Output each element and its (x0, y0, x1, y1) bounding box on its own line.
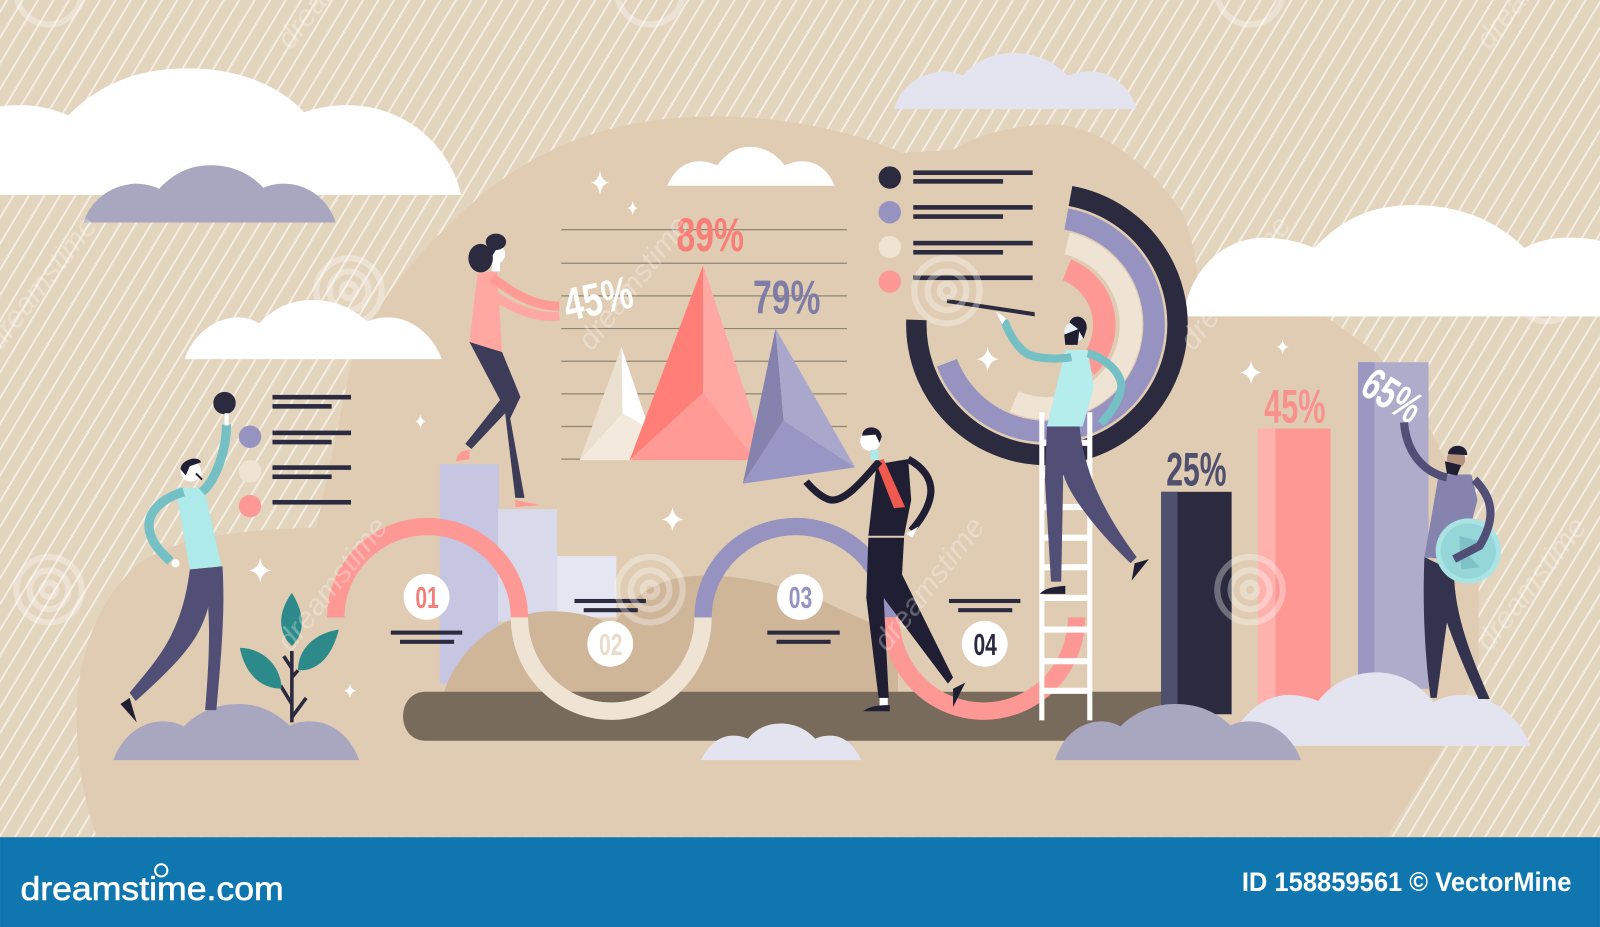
purple triangle (743, 329, 855, 484)
bar 45%: 45% (1264, 380, 1325, 432)
cloud: light bottom right (1230, 672, 1531, 746)
hill (444, 575, 898, 694)
step 04 (949, 599, 1020, 667)
cloud: grey bottom right (1055, 704, 1301, 760)
step 01 (391, 574, 462, 644)
watermarks (16, 0, 1580, 622)
bar 65%: 65% (1353, 358, 1432, 433)
background blob (77, 116, 1479, 837)
footer logo: dreamstime.com (20, 871, 284, 908)
bar 45% (1258, 380, 1331, 704)
watermark text: dreamstime (571, 209, 696, 356)
beige triangle (580, 347, 649, 460)
right legend (879, 166, 1033, 293)
watermark text: dreamstime (1173, 209, 1298, 356)
bar 25%: 25% (1166, 444, 1227, 496)
watermark text: dreamstime (1468, 510, 1594, 657)
ground bar (403, 692, 1163, 741)
hill overlap (444, 611, 633, 694)
watermark text: dreamstime (866, 510, 992, 657)
cloud: light top centre (894, 53, 1137, 109)
cloud: large white right (1184, 205, 1600, 316)
cloud: white mid left (185, 300, 442, 359)
step 02: 02 (599, 628, 622, 662)
person: man on ladder (947, 299, 1149, 594)
radial chart (916, 196, 1178, 455)
footer bar (0, 837, 1600, 927)
bar 25% (1161, 444, 1232, 714)
cloud: large white top left (0, 68, 461, 195)
step bars (440, 464, 616, 684)
step 01: 01 (415, 581, 439, 615)
footer image id and credit: ID 158859561 © VectorMine (1242, 867, 1571, 897)
label 89%: 89% (677, 209, 744, 261)
step 03 (767, 574, 840, 644)
person: man with legend ball (120, 392, 236, 722)
watermark text (0, 0, 1594, 657)
step 02 (574, 599, 646, 667)
cloud: grey top left (84, 165, 336, 222)
person: woman with pink sweater (456, 234, 559, 507)
pink triangle (630, 265, 760, 460)
sparkles (249, 170, 1289, 698)
label 45%: 45% (559, 266, 637, 331)
ladder (1042, 412, 1090, 720)
left legend (239, 395, 351, 517)
person: man in suit (806, 427, 965, 711)
step 03: 03 (789, 581, 812, 615)
plant (240, 593, 339, 722)
cloud: white small centre (667, 147, 835, 186)
process curve (336, 527, 1077, 711)
person: man with coin (1404, 422, 1501, 699)
cloud: light bottom centre (701, 723, 861, 760)
step 04: 04 (973, 628, 997, 662)
label 79%: 79% (753, 271, 820, 323)
cloud: grey bottom left (113, 704, 359, 760)
watermark text: dreamstime (270, 510, 395, 657)
triangle chart (559, 209, 855, 484)
bar 65% (1353, 358, 1432, 689)
